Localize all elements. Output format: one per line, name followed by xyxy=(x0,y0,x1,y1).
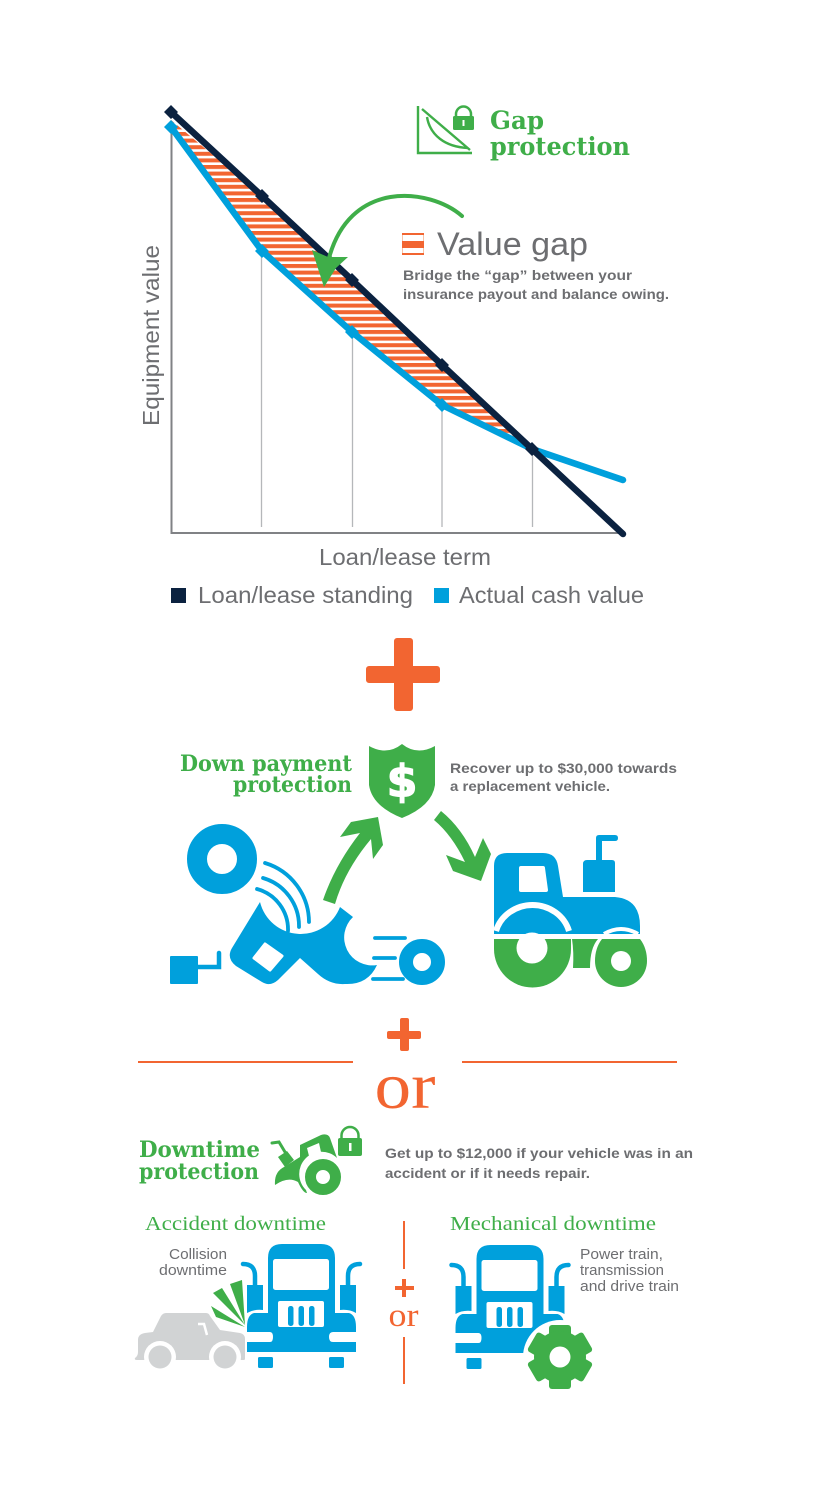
heading: gap protection: Gap xyxy=(490,106,544,135)
icon: dollar shield xyxy=(369,744,435,818)
heading: accident downtime: Accident downtime xyxy=(145,1213,326,1235)
icon: center plus xyxy=(395,1279,414,1297)
heading: down payment protection: protection xyxy=(233,772,352,798)
icon: large orange plus xyxy=(366,638,440,711)
icon: impact burst xyxy=(211,1280,245,1327)
text: downtime description: Get up to $12,000 if your vehicle was in an xyxy=(385,1145,693,1161)
chart axes xyxy=(172,127,623,533)
legend: Loan/lease standing xyxy=(198,582,413,608)
icon: truck front, accident xyxy=(243,1244,360,1368)
icon: gap protection xyxy=(418,106,474,153)
text: downtime description: accident or if it needs repair. xyxy=(385,1165,590,1181)
text: value gap description: Bridge the “gap” between your xyxy=(403,267,633,283)
text: power train description: Power train, xyxy=(580,1246,663,1263)
x axis label: Loan/lease term xyxy=(319,544,491,570)
icon: truck front with gear xyxy=(452,1245,597,1394)
heading: downtime protection: Downtime xyxy=(139,1137,260,1163)
icon: value gap swatch xyxy=(402,233,424,255)
arrow: wreck to shield xyxy=(323,817,383,904)
chart term gridlines xyxy=(262,251,532,527)
icon: replacement tractor xyxy=(494,835,647,988)
y axis label: Equipment value xyxy=(138,245,164,426)
panel: depreciation line chart xyxy=(138,105,644,608)
value gap striped area xyxy=(171,120,532,449)
text: power train description: and drive train xyxy=(580,1278,679,1295)
loan standing line xyxy=(164,105,623,534)
heading: downtime protection: protection xyxy=(139,1159,259,1185)
actual cash value line xyxy=(164,120,623,480)
heading: gap protection: protection xyxy=(490,132,630,161)
legend xyxy=(171,582,644,608)
text: power train description: transmission xyxy=(580,1262,664,1279)
icon: tilted tractor with lock xyxy=(272,1127,362,1193)
text: down payment description: Recover up to $30,000 towards xyxy=(450,760,677,776)
divider right xyxy=(462,1061,677,1063)
text: down payment description: a replacement vehicle. xyxy=(450,778,610,794)
text: center or: or xyxy=(388,1298,418,1334)
text: value gap description: insurance payout and balance owing. xyxy=(403,286,669,302)
arrow: curved pointer to value gap xyxy=(312,196,462,287)
gear xyxy=(523,1320,597,1394)
icon: small orange plus xyxy=(387,1018,421,1051)
heading: mechanical downtime: Mechanical downtime xyxy=(450,1213,656,1235)
text: collision downtime: Collision xyxy=(169,1246,227,1263)
text: or: or xyxy=(374,1050,436,1123)
icon: dollar shield: $ xyxy=(387,756,417,807)
truck front, mechanical xyxy=(452,1245,568,1369)
legend: Actual cash value xyxy=(459,582,644,608)
divider left xyxy=(138,1061,353,1063)
heading: down payment protection: Down payment xyxy=(180,751,353,777)
divider: center top rule xyxy=(403,1221,405,1269)
text: collision downtime: downtime xyxy=(159,1262,227,1279)
divider: center bottom rule xyxy=(403,1337,405,1384)
icon: car xyxy=(135,1313,245,1373)
icon: wrecked tractor xyxy=(170,834,438,984)
arrow: shield to new tractor xyxy=(434,811,491,881)
heading: value gap: Value gap xyxy=(437,226,588,262)
